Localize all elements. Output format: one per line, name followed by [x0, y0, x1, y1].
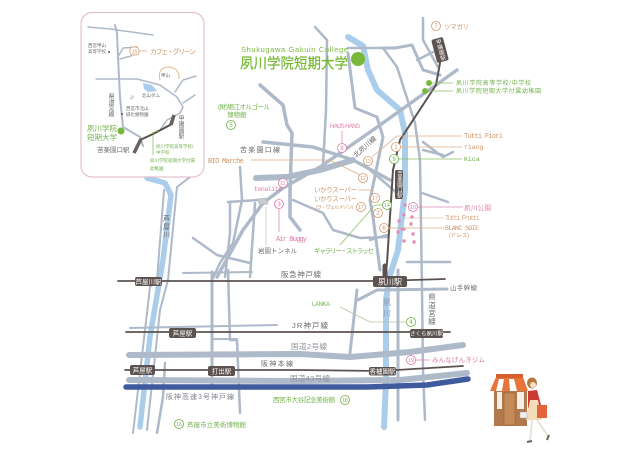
station: 夙川駅: 夙川駅	[378, 278, 402, 286]
tunnel marker	[257, 198, 268, 205]
label: riang: riang	[464, 144, 484, 151]
label: 夙川学院高等学校/中学校	[426, 79, 531, 87]
inset college marker	[118, 128, 124, 134]
inset cafe label: 15	[132, 50, 137, 56]
label: 国道2号線: 国道2号線	[291, 341, 328, 351]
label: 岩園トンネル	[258, 207, 298, 255]
road network	[129, 18, 467, 433]
shoes	[527, 435, 549, 442]
label: みんなげんきジム: みんなげんきジム	[432, 355, 486, 364]
illustration: shop and shopper	[490, 374, 549, 442]
label: 堀江オルゴール博物館: (財)堀江オルゴール	[218, 102, 270, 111]
label: 芦屋市立美術博物館: 16	[176, 422, 182, 428]
marker 6	[380, 224, 388, 232]
label: 夙川: 夙川	[382, 298, 392, 317]
inset labels: 幼稚園	[150, 165, 164, 172]
label: いかりスーパー 1: 17	[372, 196, 378, 202]
station: 苦楽園口駅: 苦楽園口駅	[396, 170, 403, 200]
label: ツマガリ: ツマガリ	[444, 22, 469, 31]
title: college name: 夙川学院短期大学	[240, 56, 348, 72]
label: ツマガリ: 7	[434, 24, 438, 30]
label: ギャラリー・ストラッセ	[314, 200, 392, 255]
label: 国道43号線: 国道43号線	[290, 373, 330, 383]
label: tonalite	[254, 178, 288, 193]
label: 西宮市大谷記念美術館	[273, 395, 350, 404]
shop door	[504, 393, 515, 425]
shopping bag	[537, 405, 547, 418]
label: 芦屋市立美術博物館: 芦屋市立美術博物館	[187, 420, 246, 429]
inset labels: 卍	[130, 95, 134, 100]
label: ギャラリー・ストラッセ: 14	[384, 203, 390, 209]
inset labels: 苦楽園口駅	[97, 145, 130, 154]
inset cafe label	[130, 47, 196, 56]
label: 夙川公園: 10	[410, 205, 416, 211]
label: いかりスーパー 2	[314, 195, 366, 212]
road: national route 43 expressway	[126, 379, 468, 387]
station: 夙川駅	[373, 276, 407, 287]
label: 夙川公園: 夙川公園	[464, 204, 491, 212]
marker 2: 2	[376, 211, 380, 217]
station: 阪神芦屋駅	[130, 365, 155, 375]
label: BLANC SOIE	[388, 225, 479, 239]
inset labels: 夙川学院短期大学付属	[150, 157, 195, 164]
label: 夙川公園	[408, 202, 491, 212]
inset labels: 緑化植物園	[126, 111, 149, 118]
label: Tutti Fiori	[364, 133, 503, 166]
title: college name: Shukugawa Gakuin College	[241, 45, 348, 54]
station: JR芦屋駅	[169, 328, 196, 338]
label: BLANC SOIE: (ドレス)	[449, 232, 469, 239]
label: riang: 1	[394, 145, 398, 151]
inset labels: 西宮甲山	[88, 42, 106, 49]
label: 西宮市大谷記念美術館: 18	[342, 398, 348, 404]
label: 夙川学院短期大学付属幼稚園: 夙川学院短期大学付属幼稚園	[456, 87, 541, 95]
label: JR神戸線: JR神戸線	[292, 320, 328, 330]
inset labels: 甲山	[161, 72, 170, 79]
station: 打出駅	[208, 366, 235, 376]
inset labels: 甲陽園駅	[177, 115, 184, 140]
station: 阪神芦屋駅: 芦屋駅	[133, 366, 153, 374]
inset mountain	[159, 67, 179, 80]
label: BIO Marche: BIO Marche	[208, 158, 244, 166]
label: Air Buggy: Air Buggy	[276, 236, 307, 244]
inset labels: 夙川学院	[87, 123, 117, 133]
label: Tutti Fiori: 13	[365, 159, 371, 165]
label: Tutti Frutti: Tutti Frutti	[445, 215, 480, 223]
inset pond	[143, 83, 157, 92]
inset labels	[87, 42, 195, 172]
label: Kica: 9	[392, 157, 396, 163]
shopper	[520, 378, 549, 442]
railway lines	[118, 63, 463, 371]
face	[530, 382, 536, 388]
station: さくら夙川駅	[410, 329, 443, 338]
icon: college marker	[351, 52, 365, 66]
inset labels: 高等学校	[88, 48, 106, 55]
inset cafe label: カフェ・グリーン	[150, 47, 196, 56]
label: HAUS HANS: HAUS HANS	[330, 124, 360, 130]
shop windows	[497, 392, 524, 409]
label: HAUS HANS	[330, 124, 360, 152]
legs	[530, 420, 548, 441]
inset labels: 北山ダム	[142, 92, 160, 99]
label: 山手幹線: 山手幹線	[450, 283, 478, 292]
label: いかりスーパー 2: いかりスーパー	[314, 195, 357, 203]
shop building	[494, 390, 527, 426]
label: Kica	[390, 154, 480, 164]
label: Air Buggy: 3	[277, 202, 281, 208]
inset labels: 短期大学	[87, 132, 117, 142]
label: 夙川学院短期大学付属幼稚園	[422, 87, 541, 95]
label: 阪神高速3号神戸線: 阪神高速3号神戸線	[166, 392, 234, 401]
marker 6: 6	[382, 226, 386, 232]
label: riang	[392, 142, 484, 152]
label: 岩園トンネル: 岩園トンネル	[258, 246, 298, 255]
label: ギャラリー・ストラッセ: ギャラリー・ストラッセ	[314, 247, 374, 255]
label: 苦楽園口線: 苦楽園口線	[240, 145, 280, 154]
label: 堀江オルゴール博物館: 博物館	[227, 110, 247, 119]
station: 打出駅: 打出駅	[212, 366, 232, 376]
label: BIO Marche	[208, 158, 368, 182]
rivers	[140, 37, 405, 427]
station: 苦楽園口駅	[395, 170, 403, 200]
inset rail ends	[134, 115, 174, 153]
inset map panel	[81, 12, 204, 177]
shop awning	[490, 374, 528, 391]
label: みんなげんきジム	[406, 355, 486, 364]
label: Air Buggy	[274, 200, 307, 244]
station: 香櫨園駅: 香櫨園駅	[370, 366, 396, 376]
label: 堀江オルゴール博物館	[218, 102, 270, 130]
label: Tutti Frutti	[404, 215, 480, 223]
label: 芦屋川: 芦屋川	[162, 214, 170, 238]
label: LANKA: 4	[409, 320, 413, 326]
label: 阪急神戸線: 阪急神戸線	[281, 269, 322, 279]
small bag	[520, 412, 527, 418]
label: Kica: Kica	[464, 156, 480, 163]
inset roads	[88, 25, 196, 146]
label: いかりスーパー 2: (ラ・ヴェルメゾン)	[316, 204, 353, 211]
label: 芦屋市立美術博物館	[174, 420, 246, 429]
label: 西宮市大谷記念美術館: 西宮市大谷記念美術館	[273, 395, 336, 404]
label: みんなげんきジム: 19	[408, 358, 414, 364]
station: 甲陽園駅: 甲陽園駅	[434, 38, 447, 63]
station: 甲陽園駅	[431, 37, 449, 63]
label: BIO Marche: 12	[360, 176, 366, 182]
inset labels: 夙川学院高等学校/	[156, 143, 194, 150]
label: tonalite: 11	[280, 181, 286, 187]
inset labels: 県道宮線	[107, 93, 114, 118]
label: 北山線 road: 北夙川線	[351, 134, 378, 159]
label: ツマガリ	[432, 22, 469, 31]
hair	[527, 378, 537, 388]
station: さくら夙川駅: さくら夙川駅	[410, 330, 443, 338]
marker 2	[374, 208, 382, 218]
label: いかりスーパー 1	[314, 186, 380, 202]
inset railway	[134, 116, 173, 153]
red cardigan	[528, 390, 541, 408]
inset labels: 中学校	[156, 149, 170, 156]
skirt	[526, 400, 542, 420]
label: BLANC SOIE: BLANC SOIE	[445, 225, 479, 232]
label: いかりスーパー 2: 17	[358, 205, 364, 211]
cherry blossom dots	[396, 203, 416, 244]
label: 夙川学院高等学校/中学校: 夙川学院高等学校/中学校	[456, 79, 531, 87]
label: LANKA	[312, 302, 416, 326]
station: JR芦屋駅: 芦屋駅	[173, 328, 193, 338]
label: 阪神本線: 阪神本線	[261, 359, 293, 368]
label: 県道宮線: 県道宮線	[427, 293, 436, 326]
label: tonalite: tonalite	[254, 186, 282, 193]
label: HAUS HANS: 8	[340, 146, 344, 152]
label: いかりスーパー 1: いかりスーパー	[314, 186, 357, 194]
station: 芦屋川駅: 芦屋川駅	[136, 277, 162, 286]
inset labels: 西宮市北山	[126, 105, 149, 112]
label: LANKA: LANKA	[312, 302, 330, 308]
label: 堀江オルゴール博物館: 5	[229, 123, 233, 129]
label: Tutti Fiori: Tutti Fiori	[464, 133, 503, 141]
title: college name	[240, 45, 348, 72]
